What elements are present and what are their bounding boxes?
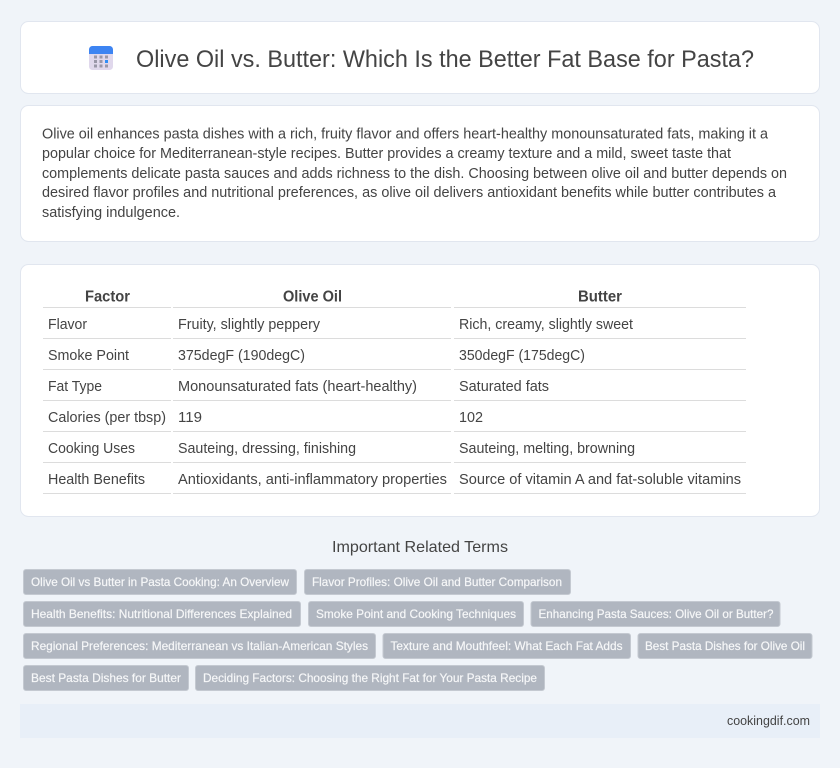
table header row: Factor — [85, 288, 130, 306]
row: fat type: Saturated fats — [459, 379, 549, 395]
intro text block: complements delicate pasta sauces and adds richness to the dish. Choosing between olive oil and butter depends on — [42, 166, 787, 182]
row: flavor: Flavor — [48, 317, 87, 333]
row: flavor: Rich, creamy, slightly sweet — [459, 317, 633, 333]
row: calories: 102 — [459, 410, 483, 426]
tag row 2: Smoke Point and Cooking Techniques — [316, 607, 516, 621]
row: health benefits — [48, 472, 741, 488]
tag row 1: Flavor Profiles: Olive Oil and Butter Comparison — [312, 575, 562, 589]
tag row 3: Best Pasta Dishes for Olive Oil — [645, 639, 805, 653]
row: smoke point: Smoke Point — [48, 348, 129, 364]
row: cooking uses: Sauteing, melting, browning — [459, 441, 635, 457]
heading: related terms: Important Related Terms — [332, 539, 508, 556]
row: cooking uses: Cooking Uses — [48, 441, 135, 457]
intro text block: Olive oil enhances pasta dishes with a rich, fruity flavor and offers heart-healthy monounsaturated fats, making it a — [42, 126, 768, 142]
tag row 4: Deciding Factors: Choosing the Right Fat for Your Pasta Recipe — [203, 671, 537, 685]
intro text block: desired flavor profiles and nutritional preferences, as olive oil delivers antioxidant benefits while butter contributes a — [42, 185, 776, 201]
tag row 3: Texture and Mouthfeel: What Each Fat Adds — [390, 639, 622, 653]
title: Olive Oil vs. Butter: Which Is the Better Fat Base for Pasta? — [136, 46, 754, 73]
tag row 2: Health Benefits: Nutritional Differences Explained — [31, 607, 292, 621]
tag row 2: Enhancing Pasta Sauces: Olive Oil or Butter? — [538, 607, 774, 621]
table header row: Olive Oil — [283, 288, 342, 306]
panel: introduction — [20, 106, 820, 242]
row: smoke point — [48, 348, 585, 364]
row: flavor — [48, 317, 633, 333]
row: flavor: Fruity, slightly peppery — [178, 317, 321, 333]
row: fat type — [48, 379, 549, 395]
footer: cookingdif.com — [727, 713, 810, 728]
row: health benefits: Antioxidants, anti-inflammatory properties — [178, 472, 447, 488]
row: fat type: Monounsaturated fats (heart-healthy) — [178, 379, 417, 395]
row: cooking uses: Sauteing, dressing, finishing — [178, 441, 356, 457]
row: smoke point: 375degF (190degC) — [178, 348, 305, 364]
row: smoke point: 350degF (175degC) — [459, 348, 585, 364]
panel: comparison table — [20, 264, 820, 516]
related term tags — [24, 570, 812, 690]
row: calories: 119 — [178, 410, 202, 426]
tag row 2 — [24, 602, 780, 626]
tag row 1 — [24, 570, 570, 594]
row: health benefits: Source of vitamin A and fat-soluble vitamins — [459, 472, 741, 488]
table header row: Butter — [578, 288, 622, 306]
tag row 1: Olive Oil vs Butter in Pasta Cooking: An Overview — [31, 575, 289, 589]
tag row 3: Regional Preferences: Mediterranean vs Italian-American Styles — [31, 639, 368, 653]
intro text block: popular choice for Mediterranean-style recipes. Butter provides a creamy texture and a mild, sweet taste that — [42, 146, 731, 162]
row: calories — [48, 410, 483, 426]
header panel — [20, 22, 820, 94]
footer — [20, 704, 820, 738]
intro text block: satisfying indulgence. — [42, 205, 180, 221]
row: calories: Calories (per tbsp) — [48, 410, 166, 426]
tag row 3 — [24, 634, 812, 658]
table header row — [85, 288, 622, 306]
row: health benefits: Health Benefits — [48, 472, 145, 488]
icon: calendar — [89, 46, 113, 70]
intro text block — [42, 126, 787, 221]
row: cooking uses — [48, 441, 635, 457]
tag row 4 — [24, 666, 544, 690]
row: fat type: Fat Type — [48, 379, 102, 395]
tag row 4: Best Pasta Dishes for Butter — [31, 671, 181, 685]
